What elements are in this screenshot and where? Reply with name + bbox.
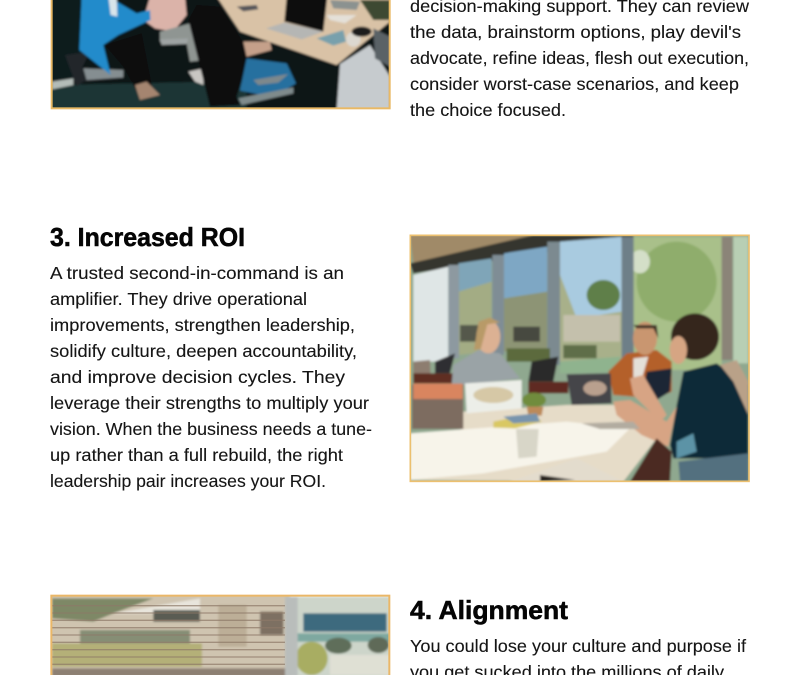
text block: increased ROI body: and improve decision cycles. They (50, 367, 345, 387)
heading: 3. Increased ROI: 3. Increased ROI (50, 222, 245, 252)
text block: increased ROI body: up rather than a full rebuild, the right (50, 445, 343, 465)
text block: increased ROI body: solidify culture, deepen accountability, (50, 341, 357, 361)
text block: increased ROI body: leverage their strengths to multiply your (50, 393, 369, 413)
text block: increased ROI body: leadership pair increases your ROI. (50, 471, 326, 491)
text block: increased ROI body: amplifier. They drive operational (50, 289, 307, 309)
text block: increased ROI body: A trusted second-in-command is an (50, 263, 344, 283)
text block: alignment body (410, 636, 746, 675)
text block: decision-making support (410, 0, 750, 120)
text block: decision-making support: advocate, refine ideas, flesh out execution, (410, 48, 749, 68)
photo: slatted wooden screen and garden view (50, 594, 390, 675)
photo: team meeting at office desk (50, 0, 391, 110)
text block: increased ROI body: vision. When the business needs a tune- (50, 419, 372, 439)
text block: increased ROI body (50, 263, 372, 491)
text block: alignment body: You could lose your culture and purpose if (410, 636, 746, 656)
text block: decision-making support: the data, brainstorm options, play devil's (410, 22, 741, 42)
text block: decision-making support: the choice focused. (410, 100, 566, 120)
heading: 4. Alignment: 4. Alignment (410, 595, 568, 625)
text block: increased ROI body: improvements, strengthen leadership, (50, 315, 355, 335)
slats (52, 606, 285, 664)
text block: decision-making support: consider worst-case scenarios, and keep (410, 74, 739, 94)
photo: three colleagues at a table by the windows (410, 234, 750, 482)
